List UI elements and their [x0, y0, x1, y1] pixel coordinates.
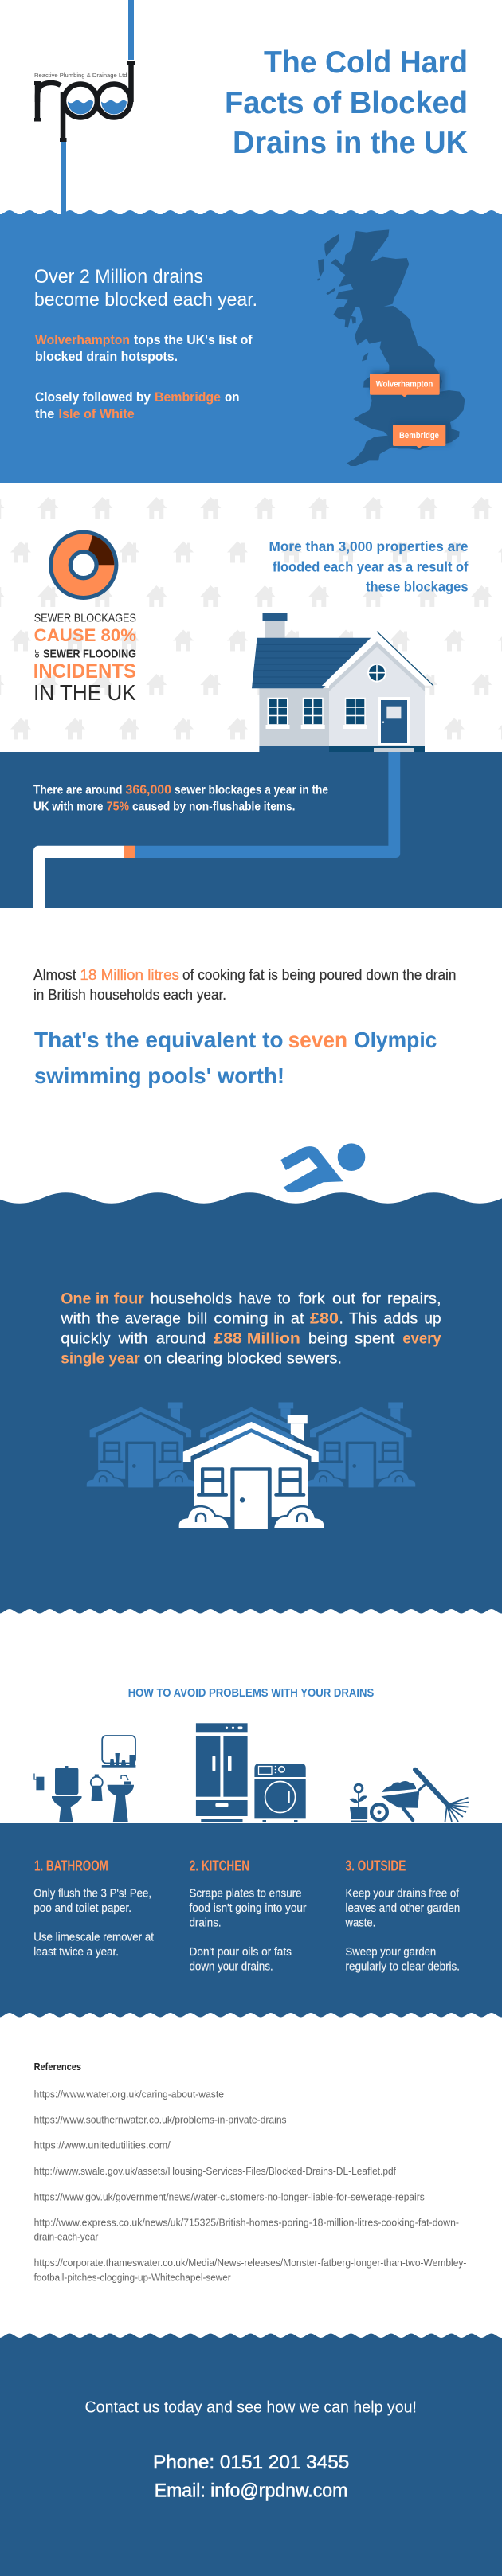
text: Bembridge: Closely followed by	[35, 390, 151, 405]
panel: references	[34, 2061, 466, 2283]
text: one in four households: average	[125, 1311, 181, 1328]
text: Bembridge	[35, 390, 239, 421]
column: bathroom: Only flush the 3 P's! Pee,	[33, 1888, 151, 1901]
text: one in four households: with	[118, 1331, 148, 1348]
text: phone: Phone: 0151 201 3455	[153, 2452, 349, 2473]
list: reference links: https://www.water.org.uk/caring-about-waste	[34, 2089, 224, 2100]
text: one in four households: the	[96, 1311, 120, 1328]
list: reference links	[34, 2089, 466, 2283]
text: one in four households: repairs,	[387, 1291, 441, 1308]
text: one in four households: out	[332, 1291, 356, 1308]
list: reference links: http://www.express.co.uk/news/uk/715325/British-homes-poring-18-million-litres-cooking-fat-down-	[34, 2217, 459, 2228]
map: Great Britain	[317, 229, 465, 466]
title: Drains in the UK	[233, 126, 468, 160]
text: one in four households: bill	[187, 1311, 207, 1328]
logo: RPD pipes	[34, 0, 135, 215]
chart: 80% donut	[50, 532, 116, 597]
column: bathroom: Use limescale remover at	[33, 1932, 154, 1944]
panel: 366,000 blockages with pipe	[0, 752, 502, 908]
text: 366,000 sewer blockages	[33, 784, 328, 814]
text: 366,000 sewer blockages: 75%	[107, 801, 129, 814]
text: one in four households: being	[308, 1331, 347, 1348]
column: kitchen: Don't pour oils or fats	[190, 1946, 292, 1959]
text: Bembridge: Bembridge	[155, 390, 221, 405]
text: 18 million litres	[33, 967, 456, 1003]
column: outside: 3. OUTSIDE	[346, 1858, 406, 1873]
text: one in four households: .	[339, 1311, 343, 1328]
text: Bembridge: Isle of White	[59, 407, 135, 421]
panel: cost of repairs	[0, 1192, 502, 1615]
text: over 2 million drains	[34, 266, 257, 311]
panel: header	[34, 0, 468, 215]
list: reference links: https://www.unitedutilities.com/	[34, 2140, 171, 2151]
panel: contact footer	[0, 2334, 502, 2576]
text: Wolverhampton	[35, 333, 253, 364]
list: reference links: https://corporate.thameswater.co.uk/Media/News-releases/Monster-fatberg-longer-than-two-Wembley-	[34, 2257, 466, 2269]
icon: swimmer	[280, 1143, 365, 1192]
text: one in four households: up	[424, 1311, 441, 1328]
text: contact us: Contact us today and see how we can help you!	[84, 2398, 417, 2416]
text: one in four households: This	[349, 1311, 377, 1328]
text: one in four households: households	[151, 1291, 232, 1308]
text: 366,000 sewer blockages: UK with more	[33, 801, 104, 814]
list: reference links: http://www.swale.gov.uk/assets/Housing-Services-Files/Blocked-Drains-DL-Leaflet.pdf	[34, 2166, 396, 2177]
column: kitchen: drains.	[190, 1916, 222, 1929]
text: one in four households: with	[60, 1311, 91, 1328]
text: over 2 million drains: Over 2 Million drains	[34, 266, 203, 288]
panel: how to avoid problems	[34, 1686, 469, 1822]
column: kitchen	[190, 1858, 307, 1973]
icon: bathroom	[34, 1736, 135, 1822]
text: 3,000 properties flooded: More than 3,000 properties are	[269, 538, 469, 554]
heading: seven Olympic pools: swimming pools' worth!	[34, 1063, 284, 1088]
text: one in four households: on clearing blocked sewers.	[144, 1351, 342, 1368]
text: one in four households: quickly	[61, 1331, 111, 1348]
column: outside: Keep your drains free of	[346, 1888, 460, 1901]
callout: Wolverhampton: Wolverhampton	[376, 379, 433, 389]
text: one in four households: every	[402, 1331, 441, 1348]
text: sewer blockages cause 80%: OF	[33, 649, 41, 658]
text: one in four households: have	[238, 1291, 272, 1308]
column: kitchen: down your drains.	[190, 1960, 273, 1973]
title: The Cold Hard	[264, 45, 468, 80]
text: over 2 million drains: become blocked each year.	[34, 289, 257, 311]
heading: seven Olympic pools	[34, 1028, 437, 1088]
column: bathroom: least twice a year.	[33, 1946, 119, 1959]
column: kitchen: food isn't going into your	[190, 1902, 307, 1915]
text: sewer blockages cause 80%	[33, 612, 136, 705]
text: sewer blockages cause 80%: CAUSE 80%	[34, 625, 136, 645]
text: one in four households: for	[362, 1291, 382, 1308]
text: Wolverhampton: Wolverhampton	[35, 333, 130, 347]
heading: seven Olympic pools: Olympic	[354, 1028, 437, 1052]
heading: references: References	[34, 2061, 81, 2073]
text: one in four households	[60, 1291, 441, 1368]
text: Wolverhampton: blocked drain hotspots.	[35, 350, 178, 364]
text: sewer blockages cause 80%: SEWER BLOCKAGES	[34, 612, 136, 625]
column: outside: regularly to clear debris.	[346, 1960, 460, 1973]
text: 366,000 sewer blockages: There are around	[33, 784, 123, 797]
column: outside: Sweep your garden	[346, 1946, 436, 1959]
heading: seven Olympic pools: seven	[288, 1028, 347, 1052]
illustration: house	[252, 613, 433, 752]
text: 3,000 properties flooded: flooded each year as a result of	[273, 559, 469, 575]
list: reference links: football-pitches-clogging-up-Whitechapel-sewer	[34, 2272, 231, 2283]
panel: sewer blockages with house pattern	[0, 486, 502, 752]
text: one in four households: to	[278, 1291, 291, 1308]
text: 18 million litres: of cooking fat is being poured down the drain	[182, 967, 456, 983]
column: bathroom: 1. BATHROOM	[34, 1858, 108, 1873]
column: outside: waste.	[345, 1916, 375, 1929]
text: one in four households: coming	[214, 1311, 269, 1328]
text: sewer blockages cause 80%: SEWER FLOODING	[43, 648, 136, 661]
text: one in four households: single year	[61, 1351, 140, 1368]
list: reference links: https://www.gov.uk/government/news/water-customers-no-longer-liable-for-sewerage-repairs	[34, 2191, 425, 2202]
logo: RPD pipes: Reactive Plumbing & Drainage Ltd	[34, 72, 127, 79]
text: one in four households: spent	[355, 1331, 395, 1348]
panel: tips	[0, 1823, 502, 2019]
title	[225, 45, 468, 160]
heading: how to avoid problems: HOW TO AVOID PROBLEMS WITH YOUR DRAINS	[128, 1686, 374, 1700]
column: outside	[345, 1858, 460, 1973]
text: email: Email: info@rpdnw.com	[155, 2480, 347, 2502]
callout: Wolverhampton	[370, 371, 445, 397]
column: outside: leaves and other garden	[346, 1902, 460, 1915]
pipe: blocked drain	[33, 752, 400, 908]
panel: blue drains hotspots	[0, 210, 502, 483]
text: 18 million litres: 18 Million litres	[80, 967, 179, 983]
callout: Bembridge: Bembridge	[399, 431, 439, 440]
text: one in four households: around	[156, 1331, 206, 1348]
text: 366,000 sewer blockages: caused by non-flushable items.	[132, 801, 295, 814]
text: 366,000 sewer blockages: 366,000	[126, 784, 171, 797]
icon: row of houses	[86, 1402, 416, 1529]
panel: cooking fat	[33, 967, 456, 1192]
text: 3,000 properties flooded: these blockages	[366, 579, 469, 595]
column: kitchen: Scrape plates to ensure	[190, 1888, 301, 1901]
text: 18 million litres: Almost	[33, 967, 76, 983]
title: Facts of Blocked	[225, 86, 468, 120]
heading: seven Olympic pools: That's the equivalent to	[34, 1028, 284, 1052]
column: bathroom	[33, 1858, 154, 1959]
text: one in four households: £80	[310, 1311, 339, 1328]
icon: garden tools	[349, 1770, 469, 1822]
column: kitchen: 2. KITCHEN	[190, 1858, 249, 1873]
text: one in four households: at	[291, 1311, 304, 1328]
text: sewer blockages cause 80%: INCIDENTS	[33, 660, 136, 683]
icon: kitchen appliances	[196, 1723, 306, 1822]
text: one in four households: adds	[383, 1311, 418, 1328]
text: 366,000 sewer blockages: sewer blockages a year in the	[175, 784, 328, 797]
column: bathroom: poo and toilet paper.	[33, 1902, 131, 1915]
text: 3,000 properties flooded	[269, 538, 469, 595]
text: Wolverhampton: tops the UK's list of	[134, 333, 253, 347]
text: Bembridge: the	[35, 407, 54, 421]
text: 18 million litres: in British households each year.	[33, 987, 226, 1003]
text: sewer blockages cause 80%: IN THE UK	[33, 680, 136, 705]
text: one in four households: £88 Million	[214, 1331, 300, 1348]
text: one in four households: One in four	[61, 1291, 144, 1308]
text: Bembridge: on	[225, 390, 239, 405]
callout: Bembridge	[393, 422, 450, 448]
text: one in four households: in	[274, 1311, 284, 1328]
list: reference links: https://www.southernwater.co.uk/problems-in-private-drains	[34, 2115, 287, 2126]
text: one in four households: fork	[298, 1291, 325, 1308]
list: reference links: drain-each-year	[34, 2232, 98, 2243]
